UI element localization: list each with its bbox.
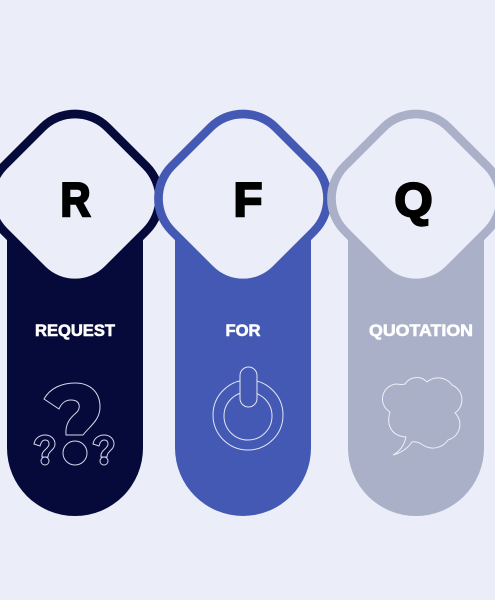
icon: power button [213, 367, 283, 450]
label: FOR: FOR [226, 322, 261, 340]
column: Q quotation [306, 89, 495, 516]
icon: speech cloud [382, 378, 462, 455]
diamond: R [0, 89, 185, 308]
letter: Q: Q [394, 173, 432, 226]
bar: request [7, 225, 143, 516]
column: F for [133, 89, 353, 516]
label: QUOTATION: QUOTATION [369, 322, 473, 340]
bar: for [175, 225, 311, 516]
diamond: F [133, 89, 353, 308]
diamond: Q [306, 89, 495, 308]
column: R request [0, 89, 185, 516]
icon: question marks [34, 383, 114, 465]
letter: F: F [234, 173, 262, 226]
label: REQUEST: REQUEST [35, 322, 115, 340]
bar: quotation [348, 225, 484, 516]
letter: R: R [60, 173, 90, 226]
